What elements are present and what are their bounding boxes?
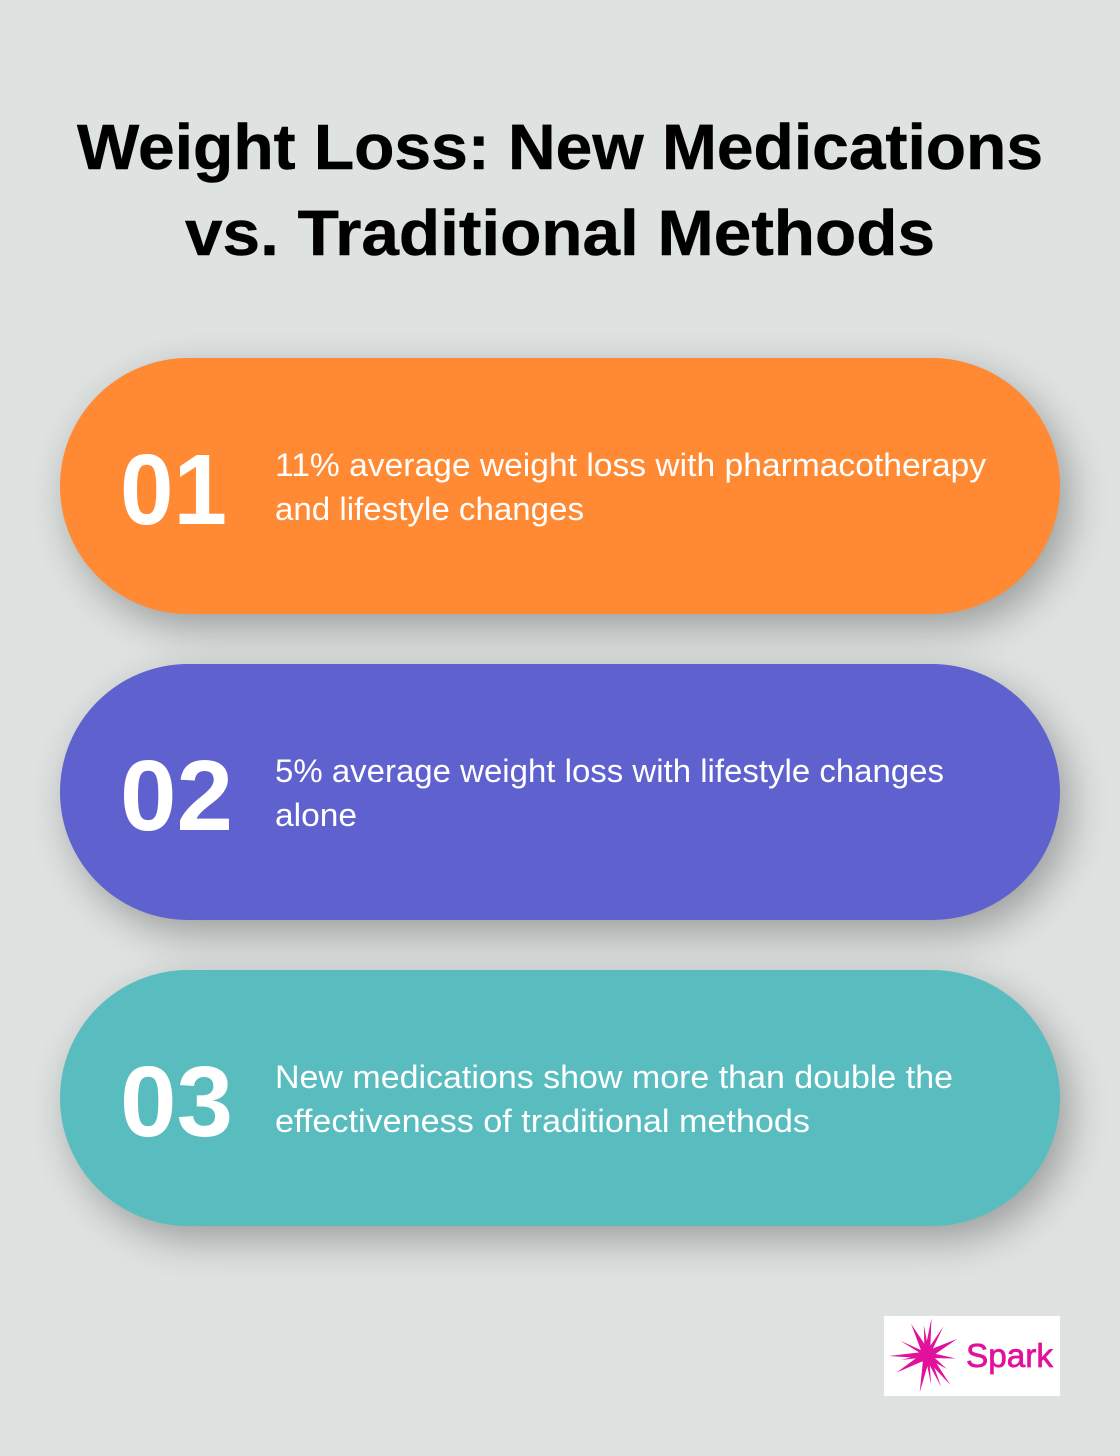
logo: Spark: [884, 1316, 1060, 1396]
text: lifestyle stat: [275, 753, 944, 833]
number 01: 01: [120, 434, 227, 546]
text: lifestyle stat: alone: [275, 797, 357, 833]
text: effectiveness comparison: [275, 1059, 953, 1139]
panel: card 03 teal: [60, 970, 1060, 1226]
icon: spark starburst: [889, 1318, 959, 1393]
text: effectiveness comparison: New medications show more than double the: [275, 1059, 953, 1095]
text: lifestyle stat: 5% average weight loss with lifestyle changes: [275, 753, 944, 789]
title: vs. Traditional Methods: [185, 197, 935, 269]
text: pharmacotherapy stat: and lifestyle changes: [275, 491, 584, 527]
number 03: 03: [120, 1046, 233, 1158]
title: [76, 111, 1043, 269]
text: pharmacotherapy stat: [275, 447, 986, 527]
panel: card 02 purple: [60, 664, 1060, 920]
text: pharmacotherapy stat: 11% average weight loss with pharmacotherapy: [275, 447, 986, 483]
text: effectiveness comparison: effectiveness of traditional methods: [275, 1103, 810, 1139]
number 02: 02: [120, 740, 233, 852]
panel: card 01 orange: [60, 358, 1060, 614]
title: Weight Loss: New Medications: [77, 111, 1043, 183]
logo wordmark: Spark: [966, 1337, 1053, 1374]
